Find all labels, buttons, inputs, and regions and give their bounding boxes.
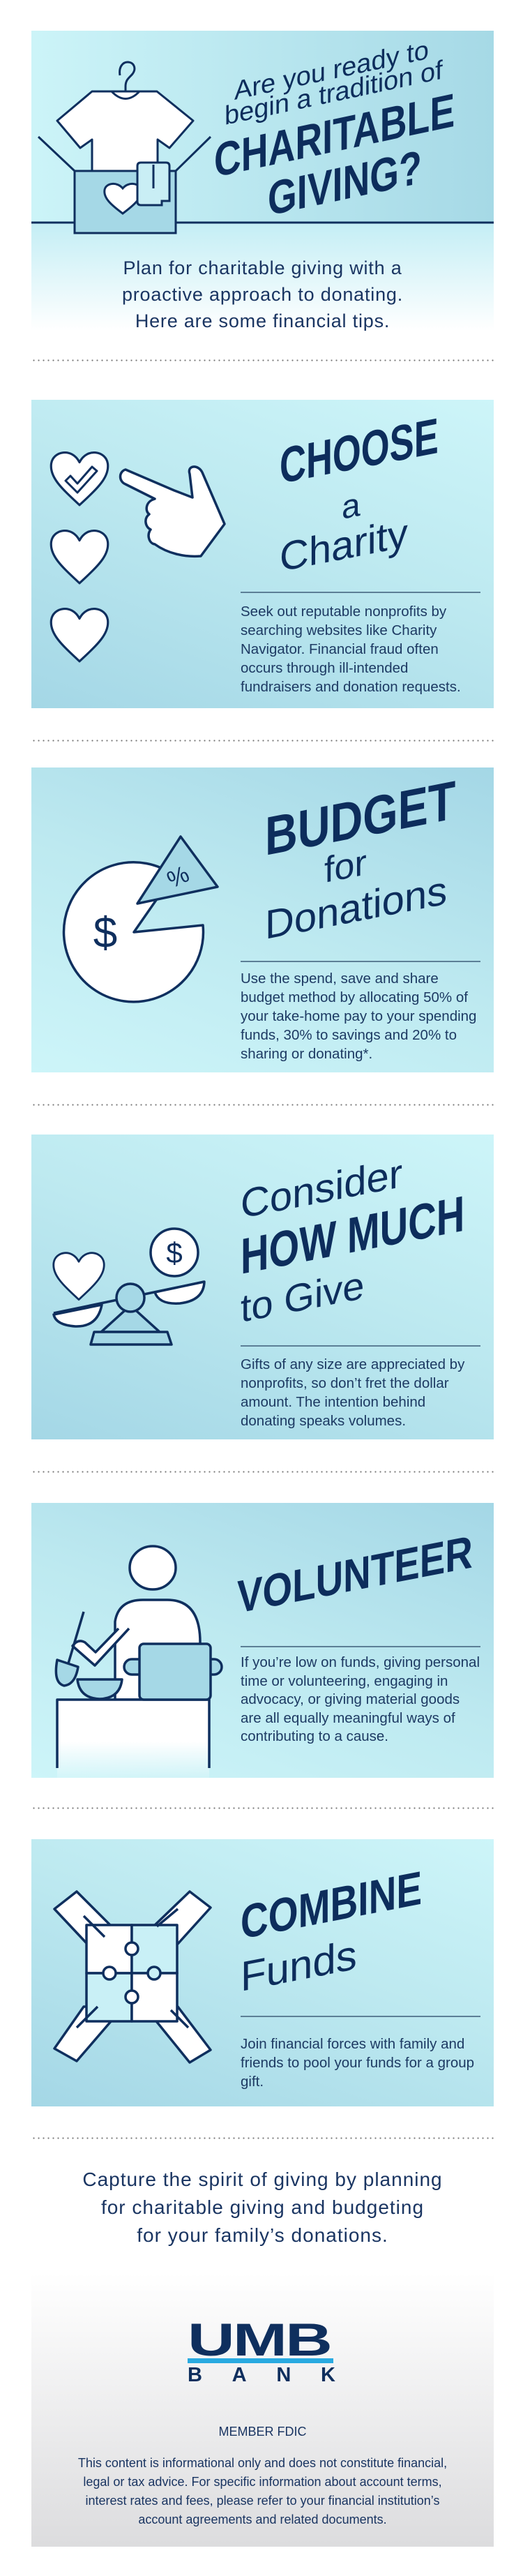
heading: BUDGET for Donations: Donations [265,867,447,948]
icon: pie chart with percent slice: % [163,860,193,894]
disclaimer: legal or tax advice. For specific information about account terms, [83,2475,442,2489]
heading: BUDGET for Donations: BUDGET [265,769,455,867]
icon: balance scale with heart and coin [52,1227,206,1346]
heading: CHOOSE a Charity: a [342,486,361,527]
member fdic: MEMBER FDIC [219,2425,307,2439]
logo: UMB Bank [188,2314,335,2386]
closing text: for your family’s donations. [137,2224,388,2246]
closing text: Capture the spirit of giving by planning [82,2169,443,2190]
heading: CHOOSE a Charity: CHOOSE [280,408,439,495]
logo: UMB Bank: N [276,2364,291,2386]
heading: Consider HOW MUCH to Give: HOW MUCH [241,1186,464,1285]
heading: COMBINE Funds: COMBINE [241,1861,422,1949]
logo: UMB Bank: UMB [188,2314,331,2365]
logo: UMB Bank: B [188,2364,202,2386]
panel: budget for donations [31,767,494,1072]
icon: pie chart with percent slice [63,835,219,1003]
icon: balance scale with heart and coin: $ [166,1236,183,1269]
disclaimer [78,2456,447,2526]
heading: BUDGET for Donations [265,769,455,948]
disclaimer: account agreements and related documents. [138,2513,387,2526]
title: Are you ready... CHARITABLE GIVING? [214,36,455,226]
title: Are you ready... CHARITABLE GIVING?: CHARITABLE [214,84,455,188]
icon: shirt in donation box [31,61,494,234]
heading: Consider HOW MUCH to Give: Consider [241,1151,402,1227]
panel: choose a charity [31,400,494,708]
heading: Consider HOW MUCH to Give: to Give [241,1263,364,1331]
panel: consider how much to give [31,1135,494,1439]
closing text: for charitable giving and budgeting [101,2196,424,2218]
header top band [31,31,494,223]
header panel [31,31,494,331]
logo: UMB Bank: K [321,2364,335,2386]
disclaimer: This content is informational only and does not constitute financial, [78,2456,447,2470]
icon: person cooking [54,1545,223,1776]
heading: VOLUNTEER: VOLUNTEER [237,1525,473,1623]
text: how much: Gifts of any size are appreciated by nonprofits, so don’t fret the dollar amount. The intention behind donating speaks volumes. [241,1356,464,1429]
footer panel [31,2272,494,2547]
heading: CHOOSE a Charity [280,408,439,581]
panel: combine funds [31,1839,494,2106]
heading: CHOOSE a Charity: Charity [280,510,408,581]
text: combine: Join financial forces with family and friends to pool your funds for a group gift. [241,2036,474,2090]
text: volunteer: If you’re low on funds, giving personal time or volunteering, engaging in advocacy, or giving material goods are all equally meaningful ways of contributing to a cause. [241,1654,480,1744]
text: budget: Use the spend, save and share budget method by allocating 50% of your take-home pay to your spending funds, 30% to savings and 20% to sharing or donating*. [241,971,476,1062]
icon: hands with puzzle [53,1890,212,2064]
title: Are you ready... CHARITABLE GIVING?: Are you ready to [234,36,429,106]
intro text: Plan for charitable giving with a [123,257,402,278]
icon: hearts and pointing hand [50,451,226,663]
title: Are you ready... CHARITABLE GIVING?: begin a tradition of [225,56,443,131]
heading: COMBINE Funds [241,1861,422,2000]
heading: BUDGET for Donations: for [324,842,367,891]
header lower band [31,223,494,331]
heading: Consider HOW MUCH to Give [241,1151,464,1331]
logo: UMB Bank: A [232,2364,247,2386]
intro text: proactive approach to donating. [122,284,403,305]
title: Are you ready... CHARITABLE GIVING?: GIVING? [268,140,422,226]
closing text [82,2169,443,2246]
text: choose a charity: Seek out reputable nonprofits by searching websites like Charity Navigator. Financial fraud often occurs through ill-intended fundraisers and donation requests. [241,604,461,695]
panel: volunteer [31,1503,494,1778]
icon: pie chart with percent slice: $ [93,909,117,957]
intro text [122,257,403,331]
heading: COMBINE Funds: Funds [241,1931,357,2000]
disclaimer: interest rates and fees, please refer to your financial institution’s [86,2494,439,2508]
